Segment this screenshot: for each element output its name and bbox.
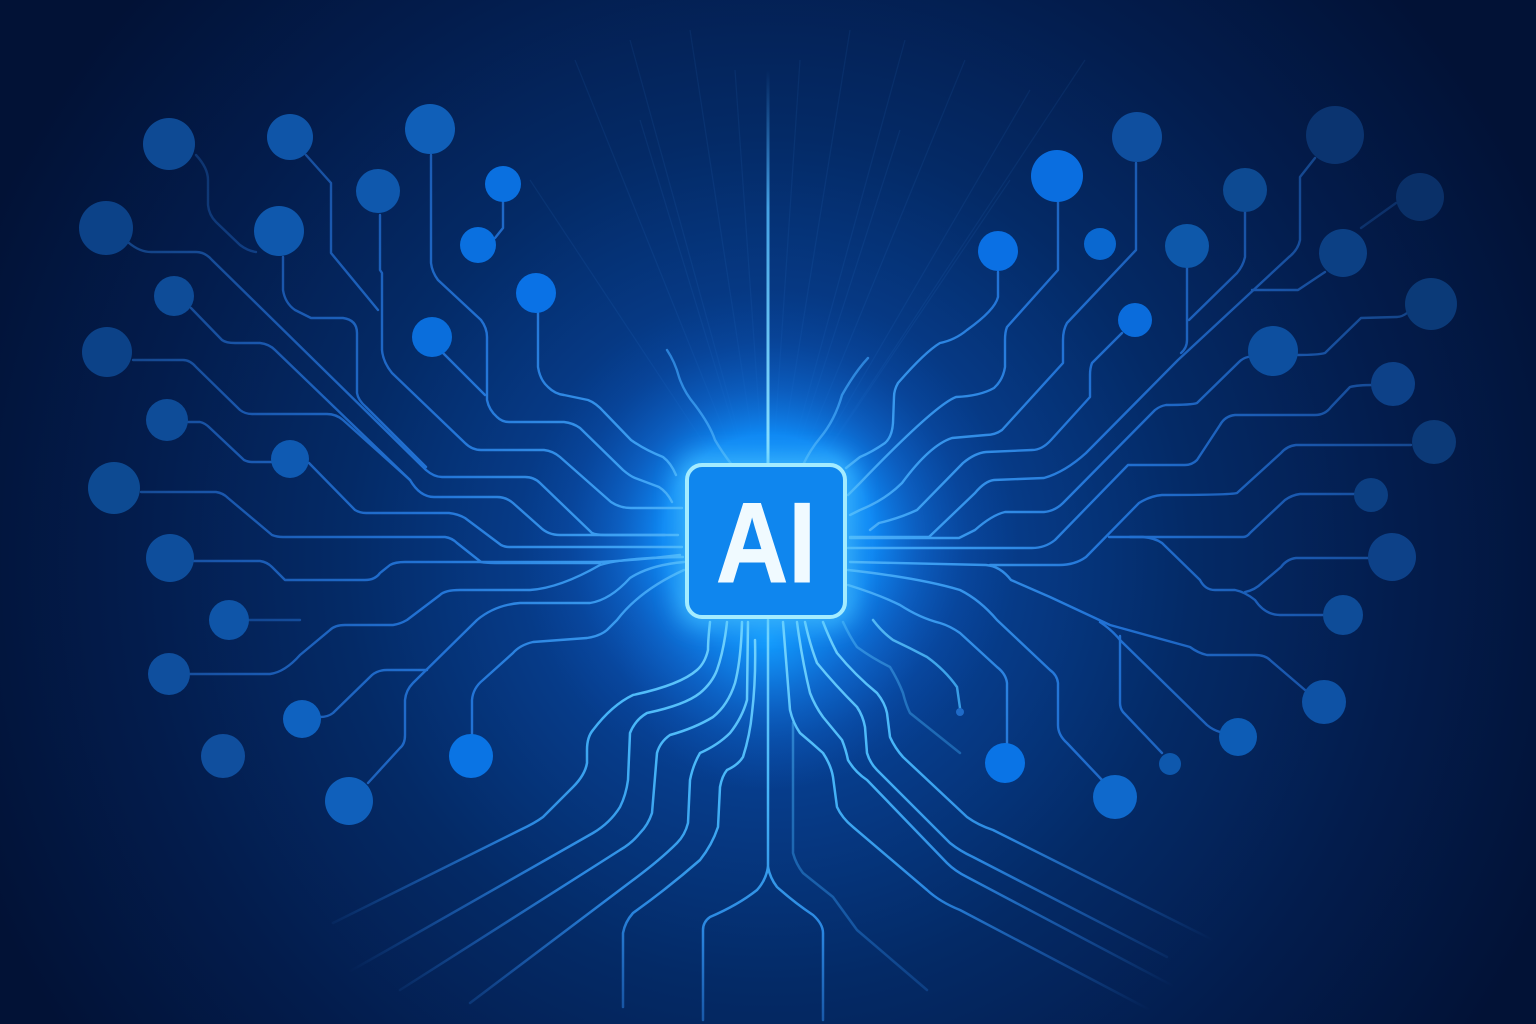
trace end dot [956, 708, 964, 716]
right nodes [978, 106, 1457, 819]
right circuit traces [803, 158, 1411, 780]
vertical beam above chip [763, 70, 773, 465]
chip label: AI [716, 480, 816, 607]
glow below chip [618, 490, 918, 790]
central glow behind chip [518, 290, 1018, 790]
faint radiating rays [530, 30, 1085, 540]
left nodes [79, 104, 556, 825]
AI chip [678, 456, 854, 626]
bottom fan of traces [333, 620, 1213, 1020]
left circuit traces [129, 155, 732, 783]
